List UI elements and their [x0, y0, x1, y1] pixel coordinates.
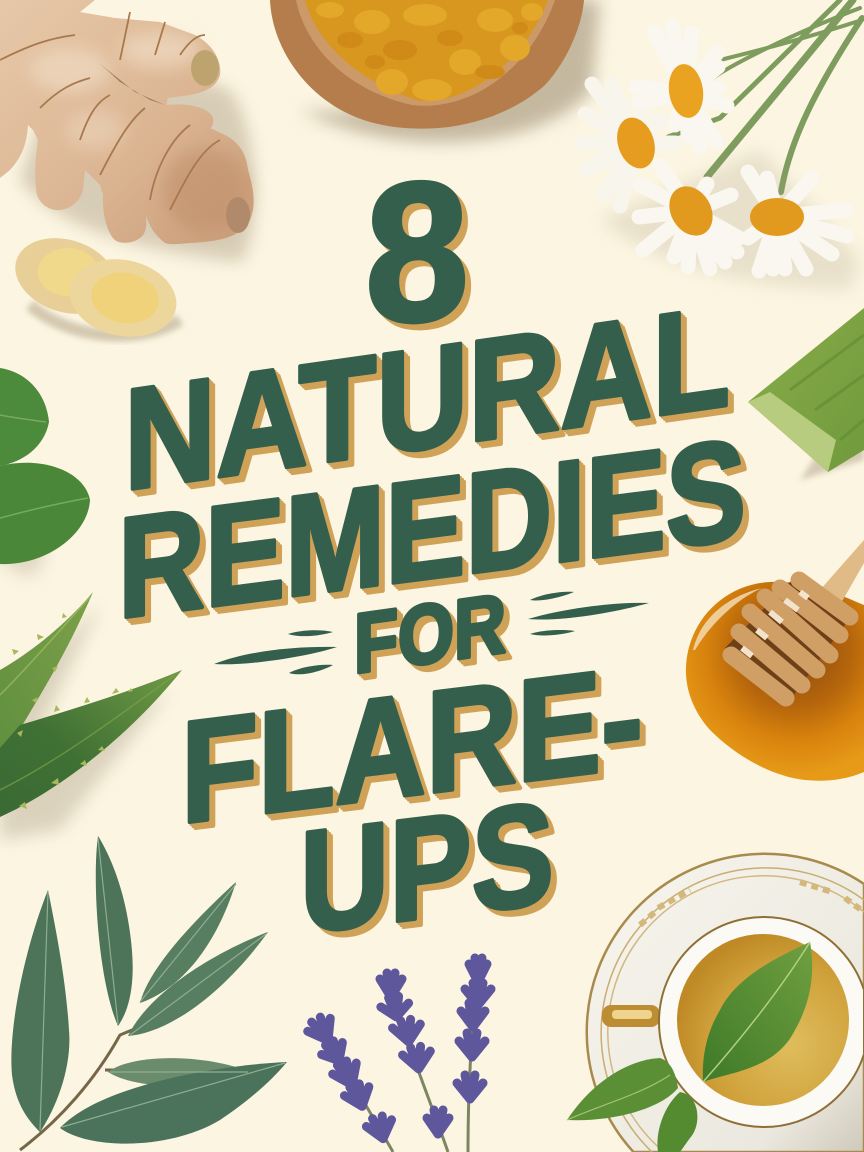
icon: eucalyptus branch	[11, 836, 287, 1150]
decorative swooshes right of FOR	[528, 592, 649, 635]
icon: wooden bowl of turmeric	[270, 0, 600, 142]
title line: NATURAL: NATURAL	[124, 274, 730, 521]
title: number 8: 8	[365, 139, 469, 365]
icon: ginger root	[0, 0, 255, 262]
icon: green leaves left	[0, 368, 90, 575]
title line: FLARE-: FLARE-	[181, 635, 643, 854]
icon: honey and dipper	[686, 540, 864, 781]
icon: aloe leaves left	[0, 592, 182, 840]
title line: FOR: FOR	[354, 576, 506, 691]
title line: UPS: UPS	[300, 770, 554, 964]
decorative swooshes left of FOR	[214, 630, 337, 674]
icon: aloe slice top right	[748, 308, 864, 480]
title line: REMEDIES: REMEDIES	[118, 409, 746, 649]
cup handle	[602, 1005, 660, 1027]
icon: ginger slices	[5, 226, 184, 346]
icon: tea cup with saucer and leaves	[567, 854, 864, 1152]
icon: lavender sprigs	[305, 958, 491, 1152]
icon: chamomile flowers	[581, 0, 862, 290]
